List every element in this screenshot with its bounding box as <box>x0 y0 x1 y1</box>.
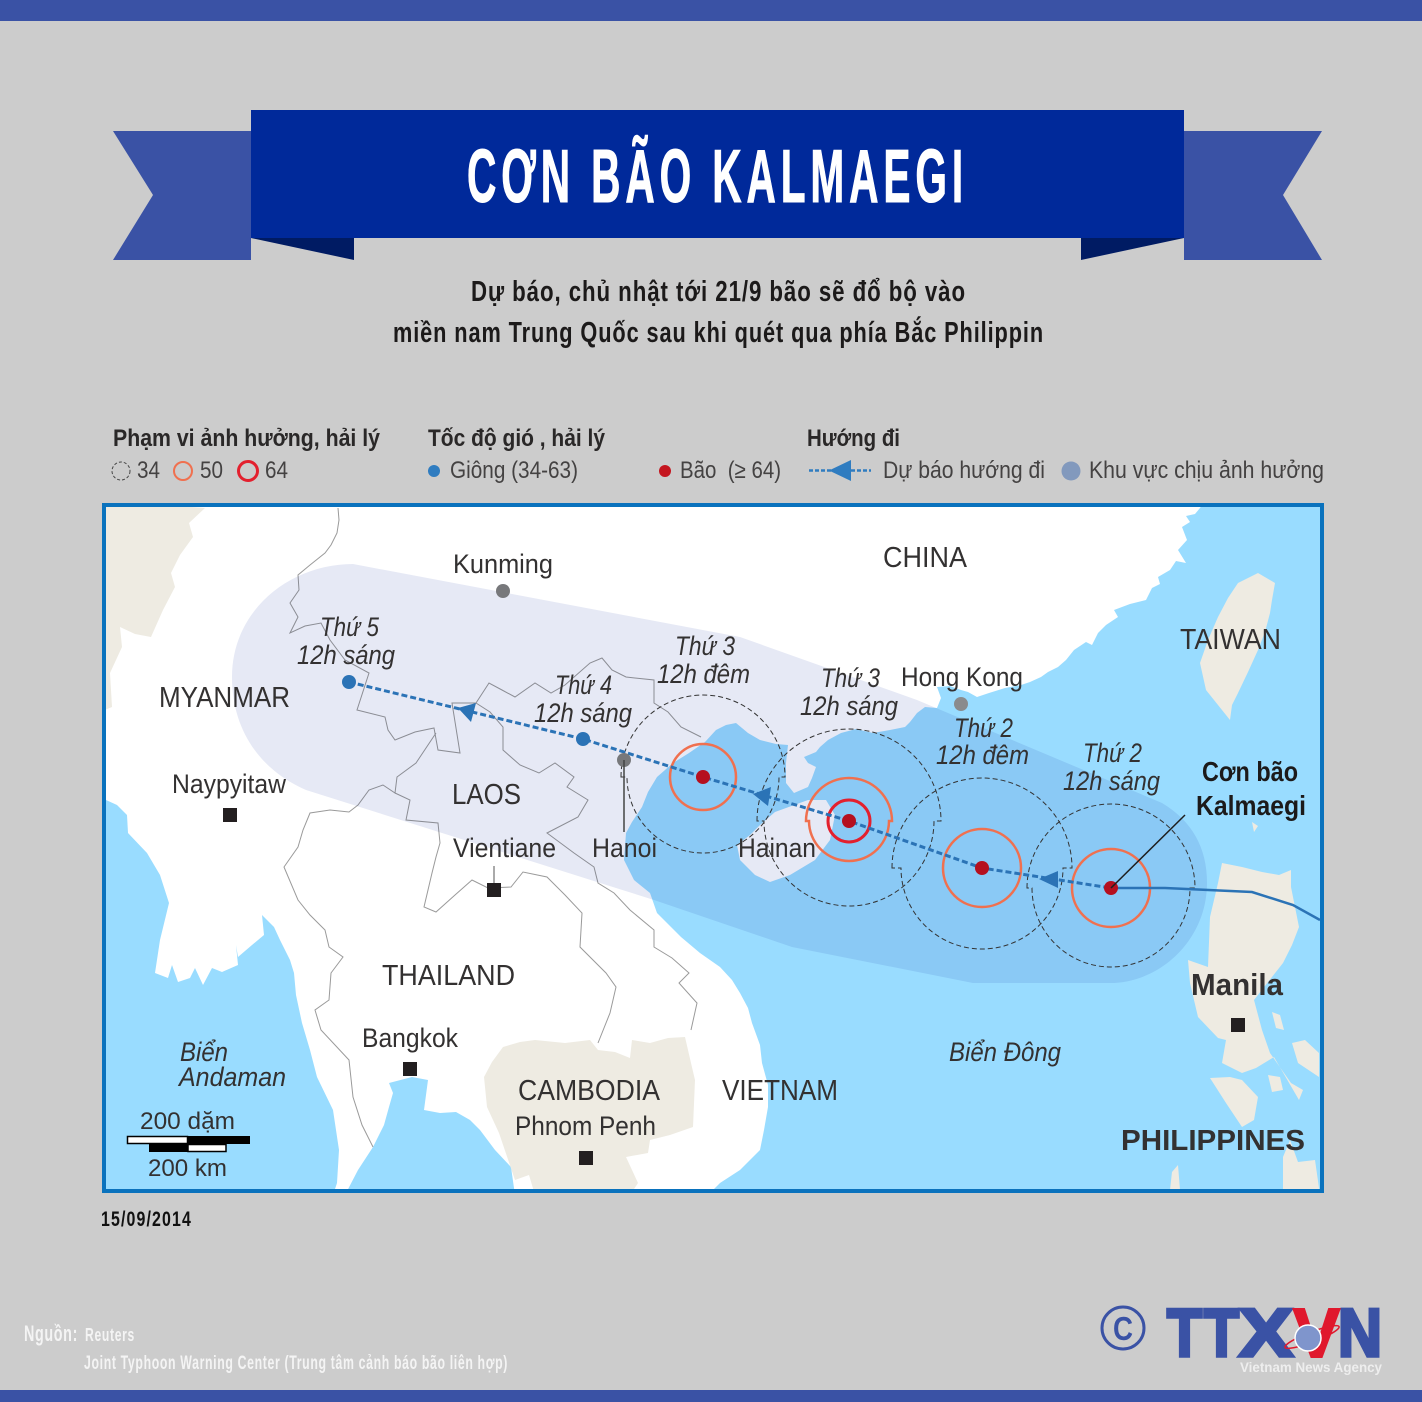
legend: wind speed <box>428 425 781 484</box>
storm timeline labels: 12h sáng <box>1063 766 1160 796</box>
city labels: Manila <box>1191 967 1284 1002</box>
sea labels <box>177 1037 1061 1092</box>
legend: direction <box>807 425 1324 484</box>
legend: influence radius: 64 <box>265 457 288 484</box>
logo: TTXVN: T <box>1204 1295 1239 1371</box>
city labels: Hanoi <box>592 833 657 863</box>
country labels: THAILAND <box>382 960 515 992</box>
title: CƠN BÃO KALMAEGI <box>467 134 968 218</box>
city markers <box>223 584 1245 1165</box>
legend: wind speed: Bão (≥ 64) <box>680 457 781 484</box>
subtitle: miền nam Trung Quốc sau khi quét qua phía Bắc Philippin <box>393 315 1044 349</box>
storm name label: Kalmaegi <box>1196 790 1306 821</box>
callout: storm pointer <box>1111 815 1185 888</box>
city labels: Bangkok <box>362 1023 458 1053</box>
country labels: PHILIPPINES <box>1121 1125 1305 1157</box>
scale bar <box>128 1108 250 1182</box>
icon: copyright: C <box>1113 1310 1133 1347</box>
storm timeline labels: 12h sáng <box>534 698 632 728</box>
country labels: CHINA <box>883 542 968 574</box>
storm radius rings <box>621 695 1195 967</box>
legend: direction: Dự báo hướng đi <box>883 457 1045 484</box>
country labels: MYANMAR <box>159 682 290 714</box>
storm timeline labels: 12h đêm <box>657 659 750 689</box>
source credits: Joint Typhoon Warning Center (Trung tâm cảnh báo bão liên hợp) <box>84 1353 508 1374</box>
storm timeline labels: 12h sáng <box>297 640 395 670</box>
storm timeline labels: Thứ 5 <box>320 612 380 642</box>
land: India and Bangladesh <box>100 500 205 712</box>
logo: TTXVN: X <box>1239 1295 1293 1371</box>
storm timeline labels: 12h sáng <box>800 691 898 721</box>
icon: copyright <box>1102 1307 1144 1349</box>
mainland landmass <box>100 500 1205 1195</box>
storm timeline labels: Thứ 2 <box>1083 738 1142 768</box>
logo: TTXVN: T <box>1167 1295 1202 1371</box>
storm timeline labels: Thứ 3 <box>821 663 880 693</box>
land: Taiwan <box>1200 573 1275 720</box>
storm timeline labels: 12h đêm <box>936 740 1029 770</box>
scale bar: 200 km <box>148 1155 227 1182</box>
logo: TTXVN: N <box>1338 1295 1382 1371</box>
city labels <box>172 549 1284 1141</box>
arrow: forecast direction <box>458 703 476 722</box>
country borders <box>284 508 701 1147</box>
source credits: Nguồn: <box>24 1321 78 1346</box>
city labels: Kunming <box>453 549 553 579</box>
country labels: CAMBODIA <box>518 1075 661 1107</box>
land: Cambodia <box>484 1037 695 1195</box>
legend: direction: Khu vực chịu ảnh hưởng <box>1089 457 1324 484</box>
legend: wind speed: Tốc độ gió , hải lý <box>428 425 606 452</box>
subtitle <box>393 276 1044 349</box>
city labels: Phnom Penh <box>515 1111 656 1141</box>
legend: wind speed: Giông (34-63) <box>450 457 578 484</box>
storm name label: Cơn bão <box>1202 756 1298 787</box>
forecast impact area <box>232 564 1207 983</box>
legend: influence radius: Phạm vi ảnh hưởng, hải lý <box>113 425 381 452</box>
source credits <box>24 1321 508 1374</box>
city labels: Hainan <box>738 833 816 863</box>
sea labels: Biển <box>180 1037 228 1067</box>
storm name label <box>1196 756 1306 821</box>
storm timeline labels: Thứ 4 <box>555 670 612 700</box>
country labels: VIETNAM <box>722 1075 838 1107</box>
subtitle: Dự báo, chủ nhật tới 21/9 bão sẽ đổ bộ vào <box>471 276 966 308</box>
legend: influence radius: 34 <box>137 457 160 484</box>
sea labels: Andaman <box>177 1062 286 1092</box>
legend: influence radius <box>112 425 381 484</box>
land: Philippines <box>1170 822 1320 1195</box>
map panel <box>100 500 1322 1195</box>
country labels <box>159 542 1305 1157</box>
legend: direction: Hướng đi <box>807 425 900 452</box>
scale bar: 200 dặm <box>140 1108 235 1135</box>
legend: influence radius: 50 <box>200 457 223 484</box>
forecast track <box>342 675 1118 895</box>
title banner <box>113 110 1322 260</box>
city labels: Vientiane <box>453 833 556 863</box>
city labels: Hong Kong <box>901 662 1023 692</box>
storm timeline labels: Thứ 2 <box>954 713 1013 743</box>
land: Hainan <box>737 800 835 882</box>
storm past track <box>1111 888 1320 920</box>
city labels: Naypyitaw <box>172 769 286 799</box>
logo: TTXVN: V <box>1293 1294 1340 1372</box>
country labels: LAOS <box>452 779 521 811</box>
sea labels: Biển Đông <box>949 1037 1061 1067</box>
storm timeline labels: Thứ 3 <box>675 631 735 661</box>
storm timeline labels <box>297 612 1160 796</box>
logo: TTXVN <box>1167 1294 1382 1375</box>
source credits: Reuters <box>85 1325 135 1345</box>
logo: TTXVN: Vietnam News Agency <box>1240 1359 1382 1375</box>
country labels: TAIWAN <box>1180 624 1281 656</box>
map frame <box>104 505 1322 1191</box>
date: 15/09/2014 <box>101 1208 192 1231</box>
